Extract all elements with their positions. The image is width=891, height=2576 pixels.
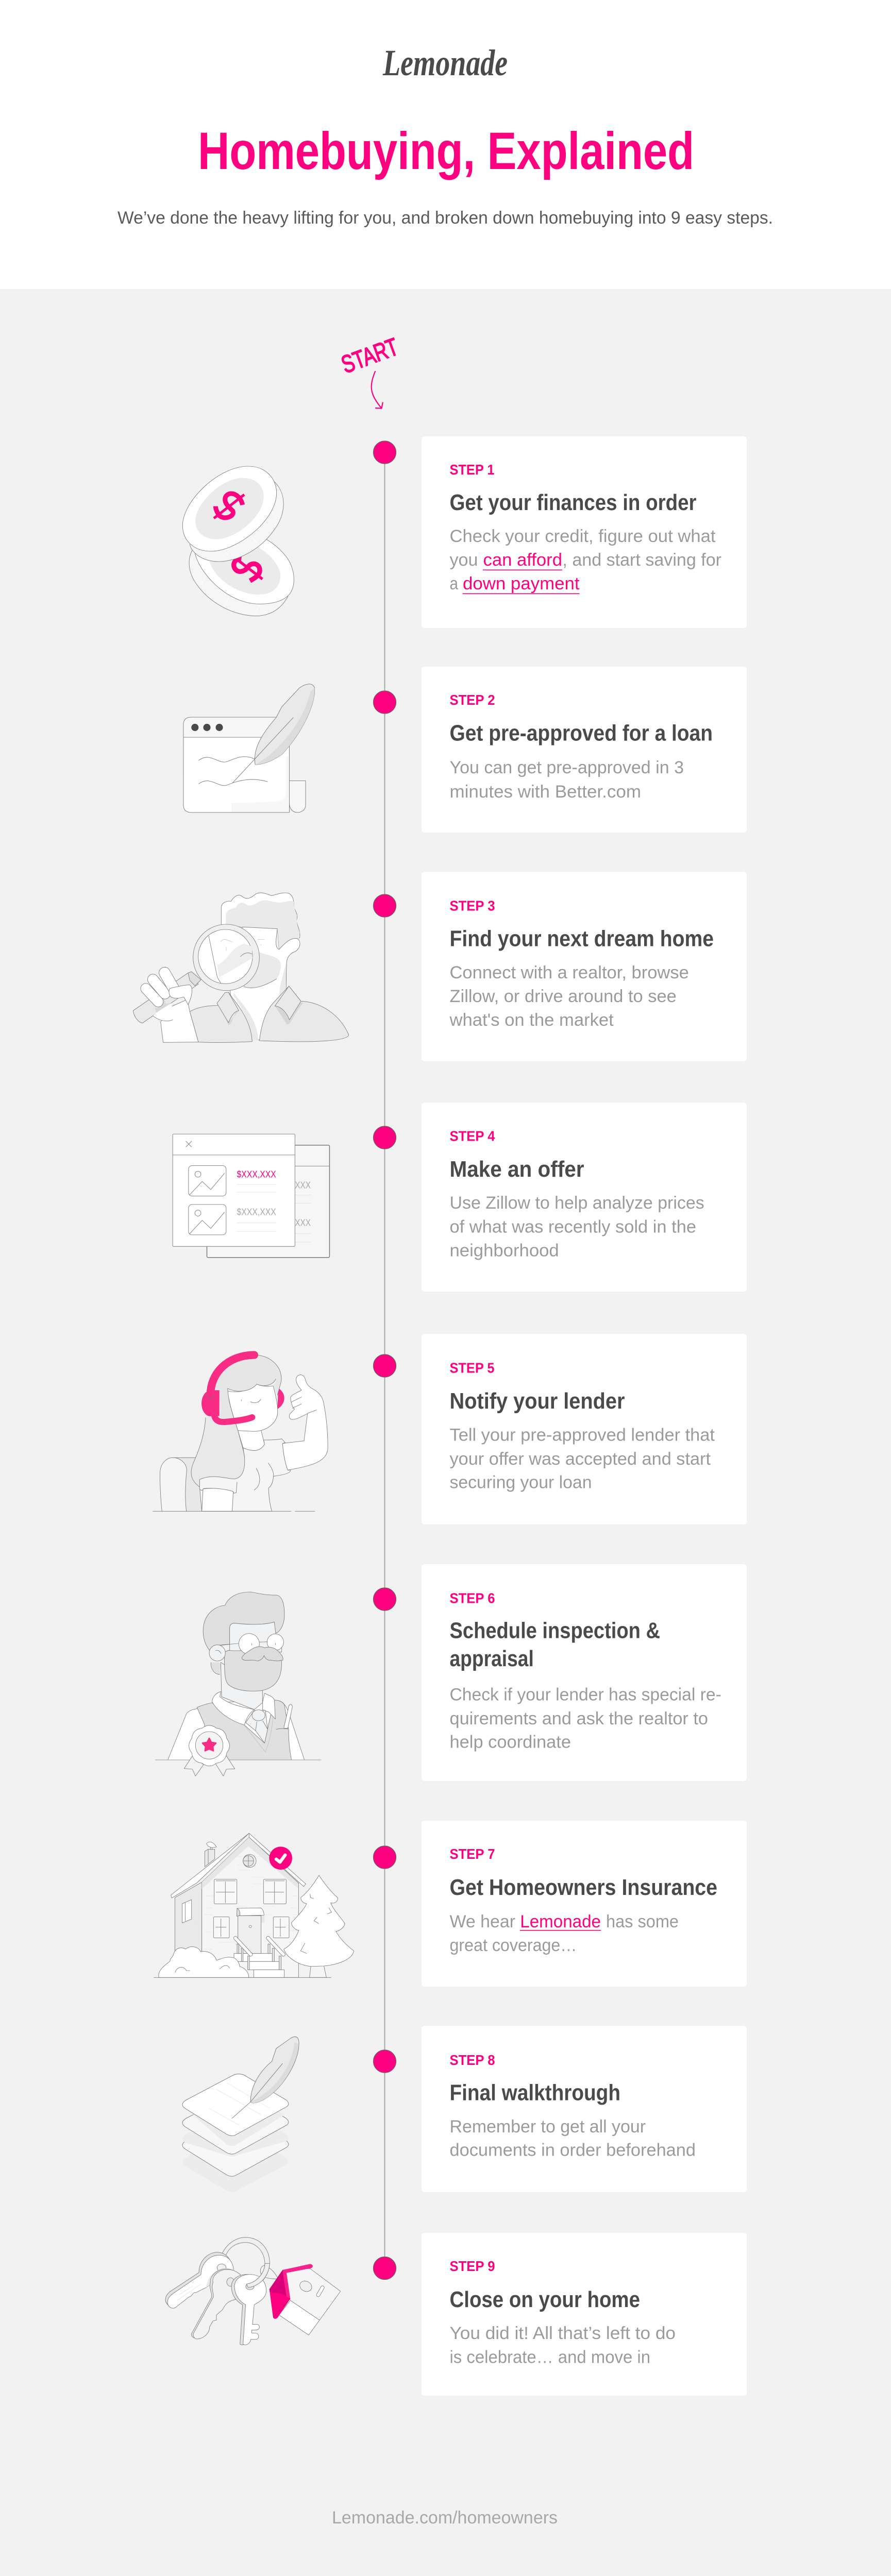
- step 7 label: STEP 7: [449, 1846, 495, 1862]
- footer url: Lemonade.com/homeowners: [332, 2508, 558, 2528]
- step 6 heading: Schedule inspection &: [449, 1618, 660, 1643]
- step 6 heading: appraisal: [449, 1646, 534, 1671]
- step 8 heading: Final walkthrough: [449, 2080, 620, 2106]
- step 1 body: Check your credit, figure out what: [449, 527, 716, 546]
- icon: house with check badge: [154, 1833, 354, 1977]
- step 9 label: STEP 9: [449, 2258, 495, 2274]
- panel: step 1: [422, 436, 747, 628]
- step 5 label: STEP 5: [449, 1360, 495, 1376]
- timeline: [373, 441, 396, 2279]
- step 4 heading: Make an offer: [449, 1157, 584, 1182]
- step 1 body: down payment: [463, 574, 580, 594]
- panel: step 3: [422, 872, 747, 1061]
- panel: step 5: [422, 1334, 747, 1524]
- icon: person with magnifying glass: [133, 893, 349, 1042]
- icon: listing windows: $XXX,XXX: [237, 1169, 276, 1180]
- logo: Lemonade: [382, 42, 508, 83]
- step 5 heading: Notify your lender: [449, 1388, 625, 1414]
- step 1 body: a: [449, 574, 459, 594]
- icon: stacked documents and quill: [182, 2037, 299, 2192]
- step 5 body: [449, 1425, 715, 1492]
- subtitle: We’ve done the heavy lifting for you, and broken down homebuying into 9 easy steps.: [117, 208, 773, 228]
- step 4 body: Use Zillow to help analyze prices: [449, 1193, 704, 1213]
- step 5 body: securing your loan: [449, 1472, 592, 1492]
- panel: step 8: [422, 2026, 747, 2192]
- step 7 body: Lemonade: [520, 1912, 601, 1931]
- step 5 body: your offer was accepted and start: [449, 1449, 711, 1469]
- step 8 body: Remember to get all your: [449, 2117, 646, 2137]
- step 8 body: [449, 2117, 696, 2160]
- step 1 label: STEP 1: [449, 462, 495, 478]
- step 5 body: Tell your pre-approved lender that: [449, 1425, 715, 1445]
- step 3 label: STEP 3: [449, 897, 495, 914]
- step 6 body: quirements and ask the realtor to: [449, 1709, 708, 1728]
- step 6 label: STEP 6: [449, 1590, 495, 1606]
- step 2 heading: Get pre-approved for a loan: [449, 720, 713, 746]
- step 2 label: STEP 2: [449, 692, 495, 708]
- panel: step 7: [422, 1821, 747, 1987]
- icon: woman with headset: [153, 1355, 328, 1511]
- step 4 body: of what was recently sold in the: [449, 1217, 696, 1237]
- panel: step 6: [422, 1564, 747, 1781]
- title: Homebuying, Explained: [198, 122, 694, 180]
- icon: listing windows: XXX: [295, 1179, 311, 1190]
- step 8 body: documents in order beforehand: [449, 2140, 696, 2160]
- step 7 body: We hear: [449, 1912, 515, 1931]
- panel: step 4: [422, 1103, 747, 1292]
- icon: keys and house tag: [165, 2238, 341, 2345]
- step 6 body: Check if your lender has special re-: [449, 1685, 721, 1705]
- step 1 body: can afford: [483, 550, 562, 570]
- step 2 body: You can get pre-approved in 3: [449, 758, 684, 777]
- step 3 body: [449, 963, 689, 1030]
- step 2 body: minutes with Better.com: [449, 782, 641, 802]
- icon: listing windows: $XXX,XXX: [237, 1207, 276, 1217]
- step 8 label: STEP 8: [449, 2052, 495, 2068]
- icon: coins: [182, 466, 294, 616]
- step 4 body: [449, 1193, 704, 1260]
- start label: START: [338, 333, 402, 379]
- step 3 body: what's on the market: [449, 1010, 614, 1030]
- step 1 body: you: [449, 550, 478, 570]
- step 6 heading: [449, 1618, 660, 1671]
- step 9 heading: Close on your home: [449, 2287, 640, 2312]
- icon: inspector man with badge: [155, 1592, 321, 1776]
- step 9 body: You did it! All that’s left to do: [449, 2324, 676, 2343]
- step 7 heading: Get Homeowners Insurance: [449, 1875, 717, 1900]
- step 2 body: [449, 758, 684, 802]
- icon: listing windows: XXX: [295, 1217, 311, 1228]
- step 9 body: is celebrate… and move in: [449, 2348, 650, 2367]
- icon: quill and document: [183, 684, 315, 812]
- step 4 body: neighborhood: [449, 1241, 559, 1260]
- icon: listing windows: [173, 1134, 329, 1258]
- step 3 body: Zillow, or drive around to see: [449, 987, 677, 1006]
- step 3 heading: Find your next dream home: [449, 926, 714, 951]
- panel: step 9: [422, 2233, 747, 2396]
- arrow: start: [372, 371, 383, 409]
- panel: step 2: [422, 667, 747, 833]
- step 1 body: , and start saving for: [562, 550, 721, 570]
- step 1 heading: Get your finances in order: [449, 490, 697, 515]
- step 7 body: great coverage…: [449, 1936, 577, 1955]
- step 3 body: Connect with a realtor, browse: [449, 963, 689, 982]
- step 7 body: [449, 1912, 679, 1955]
- step 6 body: help coordinate: [449, 1733, 571, 1752]
- step 6 body: [449, 1685, 721, 1752]
- step 1 body: [449, 527, 721, 594]
- step 4 label: STEP 4: [449, 1128, 495, 1144]
- step 7 body: has some: [606, 1912, 679, 1931]
- step 9 body: [449, 2324, 676, 2367]
